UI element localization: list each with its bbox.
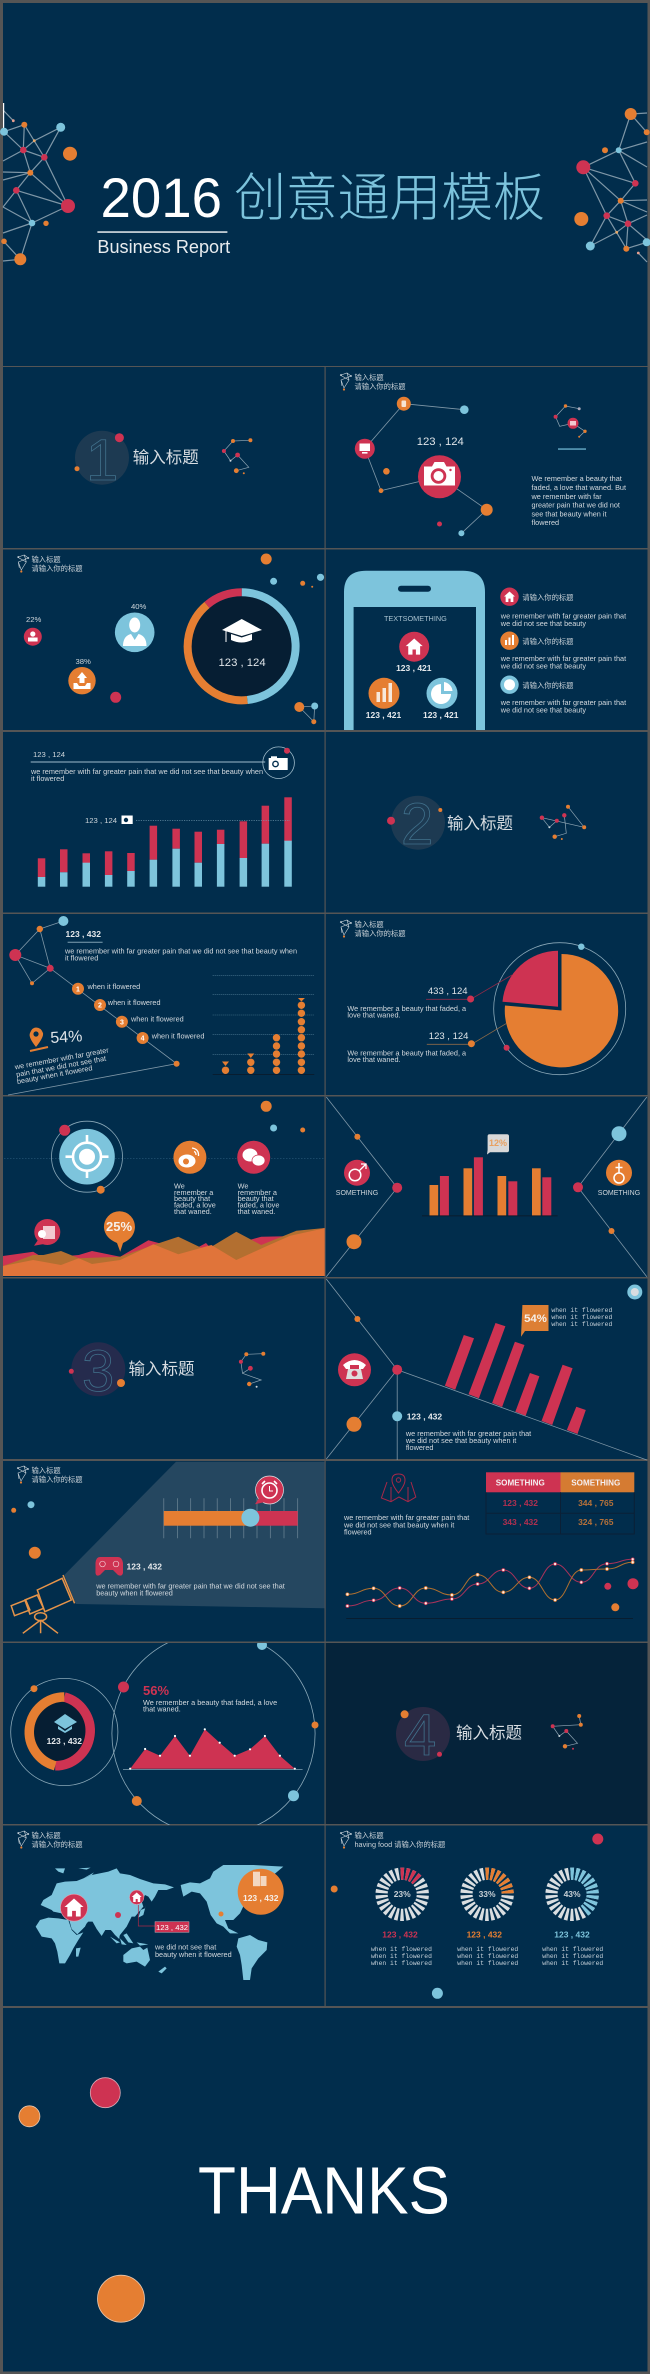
screen heading: TEXTSOMETHING [384, 614, 447, 623]
paragraph: faded, a love that waned. But [532, 483, 626, 492]
dots [331, 1834, 603, 1999]
marker dots [115, 1912, 224, 1918]
header: 请输入你的标题 [32, 1840, 83, 1849]
header: 请输入你的标题 [354, 382, 406, 391]
text: faded, a love [238, 1200, 279, 1210]
icon: weibo [173, 1141, 206, 1174]
constellation [551, 1714, 583, 1750]
slide: timeline and pictogram [8, 916, 314, 1095]
steps: 2 [98, 1003, 102, 1010]
callout: 54% [521, 1305, 548, 1337]
accent rule [558, 448, 586, 450]
value: 123 , 432 [407, 1411, 442, 1421]
paragraph [143, 1698, 277, 1714]
paragraph [343, 1513, 469, 1536]
pin with 54% [30, 1028, 83, 1051]
header: 输入标题 [354, 373, 384, 382]
section title: 输入标题 [128, 1359, 194, 1378]
constellation [554, 404, 587, 438]
steps: when it flowered [151, 1032, 204, 1041]
mono text column 1: when it flowered [371, 1953, 432, 1960]
paragraph: We remember a beauty that faded, a love [143, 1698, 277, 1707]
list item 3: we did not see that beauty [500, 706, 586, 714]
icon: wechat [237, 1141, 270, 1174]
steps: 4 [141, 1036, 145, 1043]
slide: section 2 [387, 792, 586, 857]
paragraph: we remember with far greater pain that we did not see that beauty when [30, 767, 263, 776]
list item 3 [500, 676, 626, 714]
text [174, 1182, 216, 1216]
slide: section 1 [74, 428, 252, 493]
icon: graduation cap [222, 619, 262, 642]
list item 2: 请输入你的标题 [522, 637, 574, 646]
label: SOMETHING [598, 1190, 640, 1197]
slide: section 4 [396, 1703, 583, 1768]
mono text column 2: when it flowered [457, 1953, 518, 1960]
callout: red: We remember a beauty that faded, a [347, 1004, 467, 1013]
paragraph: it flowered [31, 774, 64, 783]
chart annotation: 123 , 124 [85, 816, 118, 825]
table: 344 , 765 [578, 1498, 614, 1508]
rotated paragraph: we remember with far greater [13, 1045, 110, 1072]
network lines [365, 404, 487, 533]
mountain area chart [123, 1728, 303, 1770]
chart annotation [85, 816, 290, 825]
constellation [540, 805, 586, 840]
donut 23% [380, 1872, 424, 1916]
paragraph [64, 946, 297, 962]
donut captions: 123 , 432 [467, 1930, 502, 1940]
text [238, 1182, 279, 1216]
subtitle: Business Report [97, 237, 230, 257]
table: 343 , 432 [503, 1517, 538, 1527]
list item 2 [500, 632, 626, 671]
mono text column 2: when it flowered [457, 1960, 518, 1967]
text: remember a [174, 1188, 214, 1197]
donut 23%: 23% [394, 1889, 411, 1899]
number badge 2: 2 [401, 792, 433, 857]
header [340, 1831, 446, 1849]
list item 1: 请输入你的标题 [522, 593, 574, 602]
orange bubble [238, 1869, 284, 1915]
dots [604, 1578, 638, 1611]
text: that waned. [238, 1207, 275, 1216]
header: 请输入你的标题 [354, 929, 406, 938]
constellation [239, 1352, 265, 1388]
text: beauty that [174, 1194, 210, 1203]
item: 38% [68, 657, 96, 694]
slide: camera network [340, 373, 626, 536]
header: 请输入你的标题 [32, 1475, 83, 1484]
text: faded, a love [174, 1200, 216, 1210]
header [17, 1466, 83, 1484]
steps: when it flowered [86, 982, 140, 991]
stacked bar chart [38, 797, 292, 887]
header [17, 555, 83, 573]
slanted bar chart [445, 1323, 586, 1434]
light beam [64, 1462, 325, 1608]
donut captions [382, 1930, 590, 1940]
small orbit ring chart [11, 1678, 118, 1786]
callout: orange: 123 , 124 [429, 1031, 468, 1042]
icon: blue cap [54, 1714, 77, 1733]
button dot [627, 1284, 642, 1300]
text: beauty that [238, 1194, 274, 1203]
title rule [97, 231, 227, 233]
bar chart [422, 1157, 558, 1216]
mono text column 3: when it flowered [542, 1960, 603, 1967]
donut 33% [465, 1872, 509, 1916]
label with connector: 123 , 432 [156, 1923, 188, 1932]
rotated paragraph: beauty when it flowered [16, 1063, 93, 1086]
donut captions: 123 , 432 [554, 1930, 590, 1940]
steps [72, 982, 204, 1044]
node: camera [418, 455, 461, 498]
dots [11, 1501, 41, 1559]
text: We [174, 1182, 185, 1190]
section title: 输入标题 [447, 814, 513, 833]
value: 123 , 124 [33, 750, 66, 759]
header: 输入标题 [32, 555, 61, 564]
table: SOMETHING [571, 1479, 620, 1488]
percent: 56% [143, 1683, 169, 1698]
header [340, 920, 406, 938]
constellation [222, 438, 252, 474]
network lines [326, 1279, 647, 1460]
header: 输入标题 [32, 1466, 61, 1475]
steps: when it flowered [107, 998, 161, 1007]
pin with 54%: 54% [50, 1028, 83, 1047]
paragraph: it flowered [65, 954, 98, 962]
donut 43% [550, 1872, 594, 1916]
paragraph: flowered [344, 1528, 372, 1536]
donut 43%: 43% [564, 1889, 581, 1899]
icon: bars [368, 678, 400, 709]
node: monitor [355, 439, 375, 459]
header: 输入标题 [354, 1831, 384, 1840]
callout: red: 433 , 124 [428, 986, 468, 997]
number badge 3: 3 [82, 1339, 114, 1404]
value: 123 , 124 [417, 436, 464, 448]
number badge 3 [69, 1339, 125, 1404]
slide: radial tick donuts [331, 1831, 603, 1999]
ring chart [188, 592, 296, 700]
icon: telescope [11, 1575, 75, 1633]
mono text: when it flowered [551, 1321, 613, 1328]
slide: thanks [19, 2078, 450, 2322]
line chart [346, 1558, 634, 1619]
slide: telescope [11, 1462, 325, 1633]
slide: rings and mountain chart [10, 1643, 318, 1825]
icon: telephone [338, 1353, 371, 1386]
callout: orange: love that waned. [347, 1055, 401, 1064]
item: 38%: 38% [76, 657, 91, 666]
list item 1: we did not see that beauty [500, 619, 586, 628]
mono text column 1: when it flowered [371, 1960, 432, 1967]
icon: male [344, 1160, 370, 1186]
list item 3: 请输入你的标题 [522, 681, 574, 690]
value: 123 , 421 [423, 710, 459, 720]
left network [326, 1097, 402, 1277]
mono text: when it flowered [551, 1307, 613, 1314]
slide: stacked bars [30, 747, 294, 887]
number badge 1 [74, 428, 129, 493]
icon: alarm clock [255, 1476, 284, 1504]
dashed line [4, 1157, 324, 1159]
slide: slanted bars [326, 1279, 647, 1460]
table: 123 , 432 [503, 1498, 538, 1508]
callout: 12% [487, 1134, 509, 1154]
list item 1 [500, 588, 626, 628]
callout: red [347, 975, 512, 1020]
header: 请输入你的标题 [32, 564, 83, 573]
paragraph: We remember a beauty that [532, 474, 622, 483]
paragraph: beauty when it flowered [96, 1588, 173, 1598]
text: remember a [238, 1188, 278, 1197]
heading: chinese title: 创意通用模板 [234, 170, 545, 228]
network: left [0, 103, 77, 265]
list item 2: we did not see that beauty [500, 662, 586, 671]
list item 1: we remember with far greater pain that [500, 612, 626, 620]
mono text column 3: when it flowered [542, 1946, 603, 1953]
paragraph: greater pain that we did not [532, 501, 620, 510]
number badge 4: 4 [404, 1703, 436, 1768]
closing title: THANKS [198, 2154, 450, 2228]
dots [379, 405, 493, 536]
table: SOMETHING [496, 1479, 545, 1488]
list item 3: we remember with far greater pain that [500, 698, 626, 707]
icon: map pin [381, 1474, 416, 1502]
mono text column 2 [457, 1946, 518, 1967]
header [17, 1831, 83, 1849]
slide: exploded pie [340, 920, 626, 1075]
rotated paragraph [13, 1045, 110, 1086]
value: 123 , 432 [126, 1561, 162, 1571]
paragraph [154, 1942, 232, 1959]
header: 输入标题 [354, 920, 384, 929]
right network [573, 1097, 647, 1277]
paragraph: that waned. [143, 1704, 181, 1714]
slide: table and line chart [343, 1472, 638, 1619]
paragraph [30, 767, 263, 783]
mono text column 1: when it flowered [371, 1946, 432, 1953]
node: orange lock [397, 397, 411, 411]
value: 123 , 432 [66, 929, 101, 939]
mono text: when it flowered [551, 1314, 613, 1321]
callout: money [34, 1219, 60, 1246]
dots [261, 1101, 305, 1132]
header: 输入标题 [32, 1831, 61, 1840]
mono text column 1 [371, 1946, 432, 1967]
icon: home [399, 632, 429, 662]
decorative dots [261, 554, 324, 724]
orange bubble: 123 , 432 [243, 1893, 279, 1903]
heading: 2016: 2016 [100, 166, 222, 229]
slide: phone mockup [344, 571, 626, 730]
ring value: 123 , 432 [47, 1736, 82, 1746]
paragraph: we remember with far greater pain that we did not see that [95, 1582, 285, 1590]
label: SOMETHING [336, 1190, 378, 1197]
slide: section 3 [69, 1339, 265, 1404]
slide: bars between networks [326, 1097, 647, 1277]
dots [19, 2078, 144, 2322]
network: right [574, 108, 650, 262]
paragraph: see that beauty when it [532, 510, 607, 519]
icon: pie [426, 678, 458, 709]
paragraph: we did not see that [154, 1942, 216, 1952]
big orbit [112, 1643, 318, 1825]
number badge 2 [387, 792, 445, 857]
marker: big home [60, 1894, 88, 1921]
item: 40% [115, 602, 154, 652]
nodes [346, 1316, 402, 1432]
paragraph [405, 1429, 531, 1452]
progress chart [164, 1498, 298, 1538]
phone [344, 571, 485, 730]
paragraph [95, 1582, 285, 1598]
slide: title [0, 103, 650, 265]
camera badge [263, 747, 294, 778]
steps: when it flowered [130, 1015, 184, 1024]
mono text [551, 1307, 613, 1328]
icon: gamepad [96, 1557, 123, 1576]
ring value: 123 , 124 [218, 657, 266, 669]
steps: 1 [76, 986, 80, 993]
mono text column 3: when it flowered [542, 1953, 603, 1960]
paragraph: we remember with far greater pain that [405, 1429, 531, 1438]
callout: red: love that waned. [347, 1010, 401, 1020]
slide: target and area chart [3, 1101, 325, 1276]
world map [36, 1865, 283, 1980]
header [340, 373, 406, 391]
rotated paragraph: pain that we did not see that [15, 1054, 107, 1079]
list item 2: we remember with far greater pain that [500, 654, 626, 663]
number badge 4 [396, 1703, 450, 1768]
paragraph: we did not see that beauty when it [405, 1436, 516, 1445]
mono text column 3 [542, 1946, 603, 1967]
icon: target [52, 1121, 122, 1194]
rule [31, 762, 265, 763]
paragraph [530, 474, 626, 527]
mono text column 2: when it flowered [457, 1946, 518, 1953]
item: 22%: 22% [26, 615, 42, 624]
dot [110, 692, 121, 703]
donut captions: 123 , 432 [382, 1930, 418, 1940]
donut 33%: 33% [479, 1889, 496, 1899]
callout: 25% [104, 1211, 135, 1252]
network [8, 916, 180, 1095]
callout: 12%: 12% [489, 1138, 507, 1148]
paragraph: we remember with far greater pain that [343, 1513, 469, 1522]
pie chart [494, 943, 626, 1075]
paragraph: we remember with far [530, 492, 602, 501]
icon: female [606, 1160, 632, 1186]
section title: 输入标题 [133, 448, 199, 467]
paragraph: beauty when it flowered [155, 1950, 232, 1959]
pictogram chart [213, 975, 314, 1075]
paragraph: we did not see that beauty when it [343, 1520, 454, 1530]
text: We [238, 1182, 248, 1190]
number badge 1: 1 [86, 428, 118, 493]
callout: 54%: 54% [524, 1313, 547, 1325]
table [486, 1472, 634, 1534]
area chart [3, 1228, 325, 1276]
text: that waned. [174, 1207, 212, 1216]
header: having food 请输入你的标题 [354, 1840, 446, 1849]
callout: 25%: 25% [106, 1219, 132, 1234]
paragraph: flowered [532, 518, 559, 527]
paragraph: flowered [406, 1443, 433, 1452]
table: 324 , 765 [578, 1517, 614, 1527]
item: 40%: 40% [131, 602, 147, 611]
label with connector [138, 1905, 189, 1932]
marker: small home [130, 1890, 144, 1905]
value: 123 , 421 [396, 663, 432, 673]
rule [68, 941, 103, 944]
slide: world map [17, 1831, 284, 1980]
slide: donut with percentages [17, 554, 324, 724]
paragraph: we remember with far greater pain that we did not see that beauty when [64, 946, 297, 956]
callout: orange [347, 1023, 507, 1064]
steps: 3 [120, 1019, 124, 1026]
item: 22% [24, 615, 42, 646]
section title: 输入标题 [456, 1724, 522, 1743]
callout: orange: We remember a beauty that faded, a [347, 1048, 467, 1058]
value: 123 , 421 [366, 710, 401, 720]
